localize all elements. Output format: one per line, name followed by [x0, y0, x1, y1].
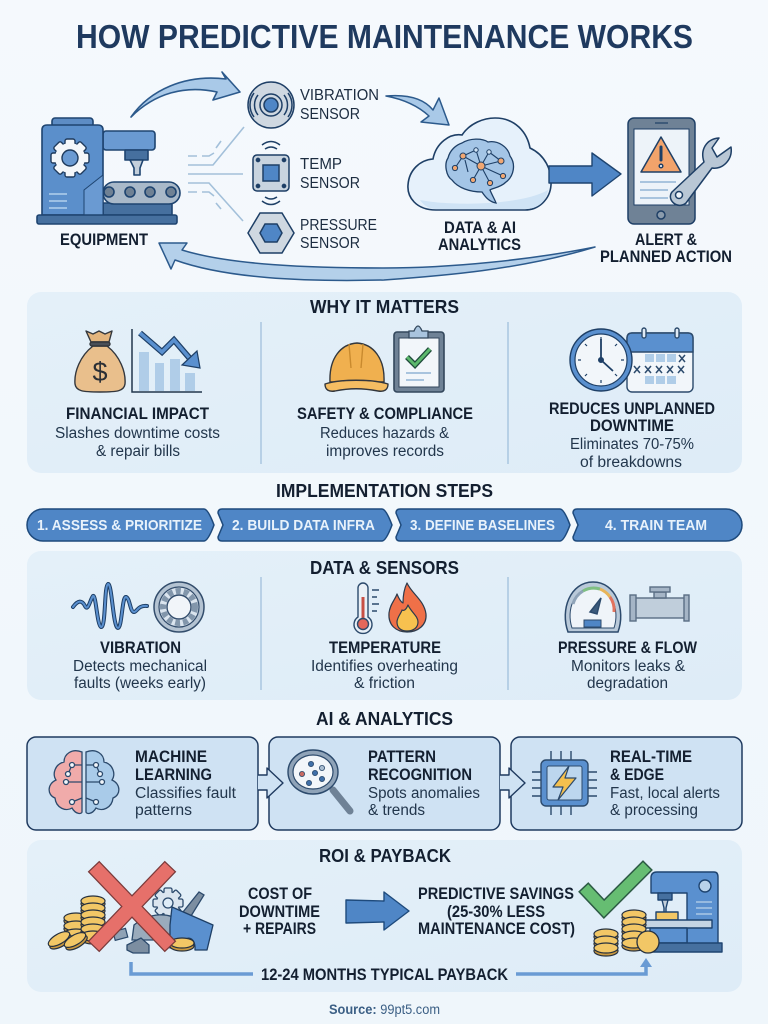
text: cost of downtime: DOWNTIME: [239, 903, 320, 921]
icon: cloud with brain: [408, 118, 551, 210]
text: vibration: Detects mechanical: [73, 658, 207, 675]
text: predictive savings: PREDICTIVE SAVINGS: [418, 885, 574, 903]
step 2: 2. BUILD DATA INFRA: [232, 517, 375, 534]
step 1: [27, 509, 214, 541]
signal lines: [188, 127, 244, 221]
heading: implementation steps: IMPLEMENTATION STEPS: [276, 480, 493, 501]
text: machine learning: LEARNING: [135, 766, 212, 784]
text: real-time and edge: & EDGE: [610, 766, 664, 784]
text: reduces unplanned downtime: [549, 400, 715, 471]
text: safety and compliance: [297, 405, 473, 460]
step 3: [396, 509, 570, 541]
text: temperature: [311, 639, 458, 692]
icon: chip with bolt: [532, 751, 597, 815]
arrow: feedback to equipment: [159, 243, 595, 280]
text: cost of downtime: [239, 885, 320, 938]
text: financial impact: FINANCIAL IMPACT: [66, 405, 209, 423]
heading: AI and analytics: AI & ANALYTICS: [316, 708, 453, 729]
text: reduces unplanned downtime: REDUCES UNPLANNED: [549, 400, 715, 418]
text: vibration: faults (weeks early): [74, 675, 206, 692]
label: data and AI analytics: DATA & AI: [444, 219, 516, 237]
label: alert and planned action: ALERT &: [635, 231, 697, 249]
text: temperature: TEMPERATURE: [329, 639, 441, 657]
text: pattern recognition: RECOGNITION: [368, 766, 472, 784]
text: predictive savings: MAINTENANCE COST): [418, 920, 575, 938]
arrow: cost to savings: [346, 892, 409, 930]
icon: equipment machine: [37, 118, 180, 224]
arrow: pattern recognition to real-time: [500, 768, 525, 798]
arrow: machine learning to pattern recognition: [258, 768, 283, 798]
text: pattern recognition: PATTERN: [368, 748, 436, 766]
label: temp sensor: TEMP: [300, 156, 342, 173]
label: data and AI analytics: ANALYTICS: [438, 236, 521, 254]
icon: vibration sensor: [248, 82, 294, 128]
icon: healthy machine with coins: [594, 872, 722, 956]
text: real-time and edge: [610, 748, 720, 819]
text: predictive savings: (25-30% LESS: [447, 903, 545, 921]
text: pressure and flow: Monitors leaks &: [571, 658, 686, 675]
icon: pressure gauge: [565, 582, 621, 632]
text: machine learning: Classifies fault: [135, 785, 237, 802]
text: machine learning: [135, 748, 237, 819]
step 2: [218, 509, 392, 541]
text: predictive savings: [418, 885, 575, 938]
text: temperature: Identifies overheating: [311, 658, 458, 675]
arrow: cloud to alert: [549, 153, 621, 196]
step 1: 1. ASSESS & PRIORITIZE: [37, 517, 202, 534]
label: vibration sensor: [300, 87, 379, 123]
heading: data and sensors: DATA & SENSORS: [310, 557, 459, 578]
text: safety and compliance: Reduces hazards &: [320, 425, 450, 442]
text: reduces unplanned downtime: DOWNTIME: [590, 417, 674, 435]
icon: vibration wave: [73, 584, 147, 628]
text: pattern recognition: Spots anomalies: [368, 785, 480, 802]
steps: chevron row: [27, 509, 742, 541]
icon: two-tone brain: [49, 751, 119, 813]
text: safety and compliance: SAFETY & COMPLIANCE: [297, 405, 473, 423]
text: vibration: VIBRATION: [100, 639, 181, 657]
text: pressure and flow: PRESSURE & FLOW: [558, 639, 697, 657]
panel: pattern recognition: [269, 737, 500, 830]
panel: ROI and payback: [27, 840, 742, 992]
text: financial impact: Slashes downtime costs: [55, 425, 220, 442]
panel: machine learning: [27, 737, 258, 830]
icon: clipboard with check: [394, 326, 444, 392]
label: data and AI analytics: [438, 219, 521, 254]
title: HOW PREDICTIVE MAINTENANCE WORKS: [76, 18, 693, 55]
heading: ROI and payback: ROI & PAYBACK: [319, 845, 452, 866]
label: pressure sensor: [300, 217, 377, 252]
panel: data and sensors: [27, 551, 742, 700]
icon: flame: [389, 583, 426, 632]
text: real-time and edge: & processing: [610, 802, 698, 819]
text: safety and compliance: improves records: [326, 443, 444, 460]
text: pattern recognition: & trends: [368, 802, 425, 819]
text: payback: 12-24 MONTHS TYPICAL PAYBACK: [261, 966, 508, 984]
icon: temp sensor: [253, 142, 289, 204]
text: real-time and edge: Fast, local alerts: [610, 785, 720, 802]
heading: why it matters: WHY IT MATTERS: [310, 296, 459, 317]
arrow: payback timeline: [131, 958, 652, 974]
label: temp sensor: SENSOR: [300, 175, 360, 192]
label: temp sensor: [300, 156, 360, 192]
icon: calendar: [627, 328, 693, 392]
text: pressure and flow: degradation: [587, 675, 668, 692]
text: temperature: & friction: [354, 675, 415, 692]
text: cost of downtime: + REPAIRS: [243, 920, 316, 938]
icon: tablet alert and wrench: [628, 118, 731, 224]
icon: broken machinery and coins: [46, 888, 213, 953]
text: cost of downtime: COST OF: [248, 885, 312, 903]
text: reduces unplanned downtime: of breakdowns: [580, 454, 682, 471]
icon: pipe: [630, 587, 689, 621]
panel: real-time and edge: [511, 737, 742, 830]
arrow: sensors to cloud: [386, 96, 449, 125]
label: vibration sensor: SENSOR: [300, 106, 360, 123]
icon: clock: [570, 329, 632, 391]
arrow: equipment to sensors: [131, 72, 240, 117]
icon: money bag: $: [92, 357, 108, 387]
text: financial impact: [55, 405, 220, 460]
label: pressure sensor: PRESSURE: [300, 217, 377, 234]
text: reduces unplanned downtime: Eliminates 70-75%: [570, 436, 694, 453]
text: pressure and flow: [558, 639, 697, 692]
step 3: 3. DEFINE BASELINES: [410, 517, 555, 534]
icon: magnifier: [288, 750, 350, 811]
text: real-time and edge: REAL-TIME: [610, 748, 692, 766]
icon: red X: [99, 872, 165, 941]
icon: green check: [588, 870, 643, 909]
label: alert and planned action: PLANNED ACTION: [600, 248, 732, 266]
panel: why it matters: [27, 292, 742, 473]
icon: money bag: [75, 331, 125, 392]
text: machine learning: MACHINE: [135, 748, 207, 766]
text: pattern recognition: [368, 748, 480, 819]
text: financial impact: & repair bills: [96, 443, 180, 460]
icon: thermometer: [354, 583, 379, 633]
source: Source: 99pt5.com: [329, 1002, 440, 1017]
icon: pressure sensor: [248, 213, 294, 253]
label: pressure sensor: SENSOR: [300, 235, 360, 252]
icon: declining chart: [132, 329, 202, 392]
step 4: [573, 509, 742, 541]
text: machine learning: patterns: [135, 802, 192, 819]
text: vibration: [73, 639, 207, 692]
step 4: 4. TRAIN TEAM: [605, 517, 707, 534]
label: vibration sensor: VIBRATION: [300, 87, 379, 104]
icon: bearing: [154, 582, 204, 632]
label: alert and planned action: [600, 231, 732, 266]
icon: hard hat: [325, 343, 388, 391]
label: equipment: EQUIPMENT: [60, 231, 148, 249]
